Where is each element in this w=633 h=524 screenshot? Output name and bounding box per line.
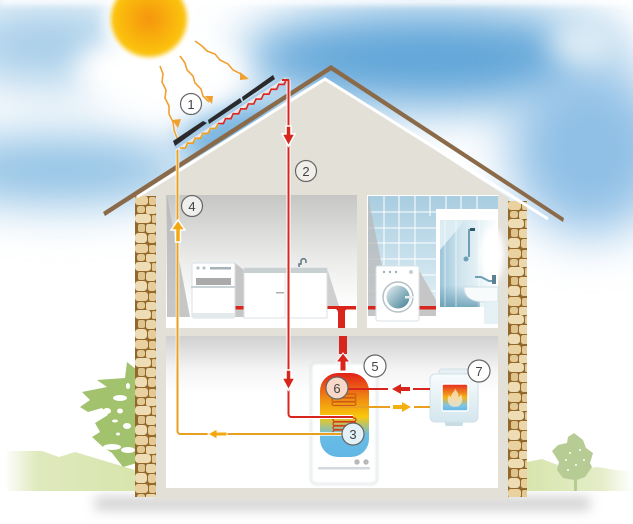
left tree xyxy=(80,362,137,467)
boiler red feed with arrow xyxy=(348,384,430,394)
basin xyxy=(464,287,498,324)
label 2: 2 xyxy=(302,164,310,179)
label 6 xyxy=(326,377,348,399)
tile grid xyxy=(368,196,498,316)
left stone wall xyxy=(135,196,156,497)
collector coil xyxy=(180,79,286,148)
roof xyxy=(103,65,564,222)
shower cabin xyxy=(436,209,504,319)
boiler xyxy=(430,369,478,426)
right tree xyxy=(552,433,593,491)
bathroom room xyxy=(367,195,504,328)
label 6: 6 xyxy=(333,381,341,396)
right hills xyxy=(527,459,633,491)
hot water tank xyxy=(311,363,377,484)
label 3 xyxy=(342,423,364,445)
label 2 xyxy=(296,160,316,182)
red up arrow above tank xyxy=(336,353,350,371)
label 3: 3 xyxy=(349,427,357,442)
washing machine xyxy=(376,266,419,321)
arrow: down lower xyxy=(282,370,295,390)
wall shadow xyxy=(167,196,190,317)
label 1: 1 xyxy=(187,97,195,112)
basement room xyxy=(166,336,498,488)
label 5 xyxy=(364,355,386,377)
label 5: 5 xyxy=(371,359,379,374)
label 4: 4 xyxy=(188,199,196,214)
label 4 xyxy=(182,196,202,216)
icon: sun xyxy=(103,0,195,65)
upper coil xyxy=(332,394,356,406)
arrow: up orange xyxy=(171,220,185,242)
house wall xyxy=(137,79,509,500)
arrow: left orange xyxy=(208,429,227,439)
label 7 xyxy=(468,360,490,382)
arrow: down upper xyxy=(282,126,295,146)
icon: flame xyxy=(448,388,462,407)
orange return pipe xyxy=(177,150,343,434)
floor xyxy=(166,317,357,328)
red flow pipe with arrows xyxy=(282,80,353,417)
label 7: 7 xyxy=(475,364,483,379)
sun rays xyxy=(160,41,249,138)
left hills xyxy=(5,451,135,491)
label 1 xyxy=(180,94,202,114)
boiler orange return with arrow xyxy=(340,402,430,412)
right stone wall xyxy=(508,201,527,497)
red skirting pipe xyxy=(235,306,356,328)
kitchen room xyxy=(166,195,357,328)
shadow: ground under house xyxy=(95,497,590,510)
solar panels xyxy=(173,75,292,151)
dishwasher xyxy=(191,263,236,318)
lower coil xyxy=(333,418,356,434)
red pipe from floor to tank xyxy=(339,336,347,354)
sink cabinet xyxy=(244,259,327,318)
